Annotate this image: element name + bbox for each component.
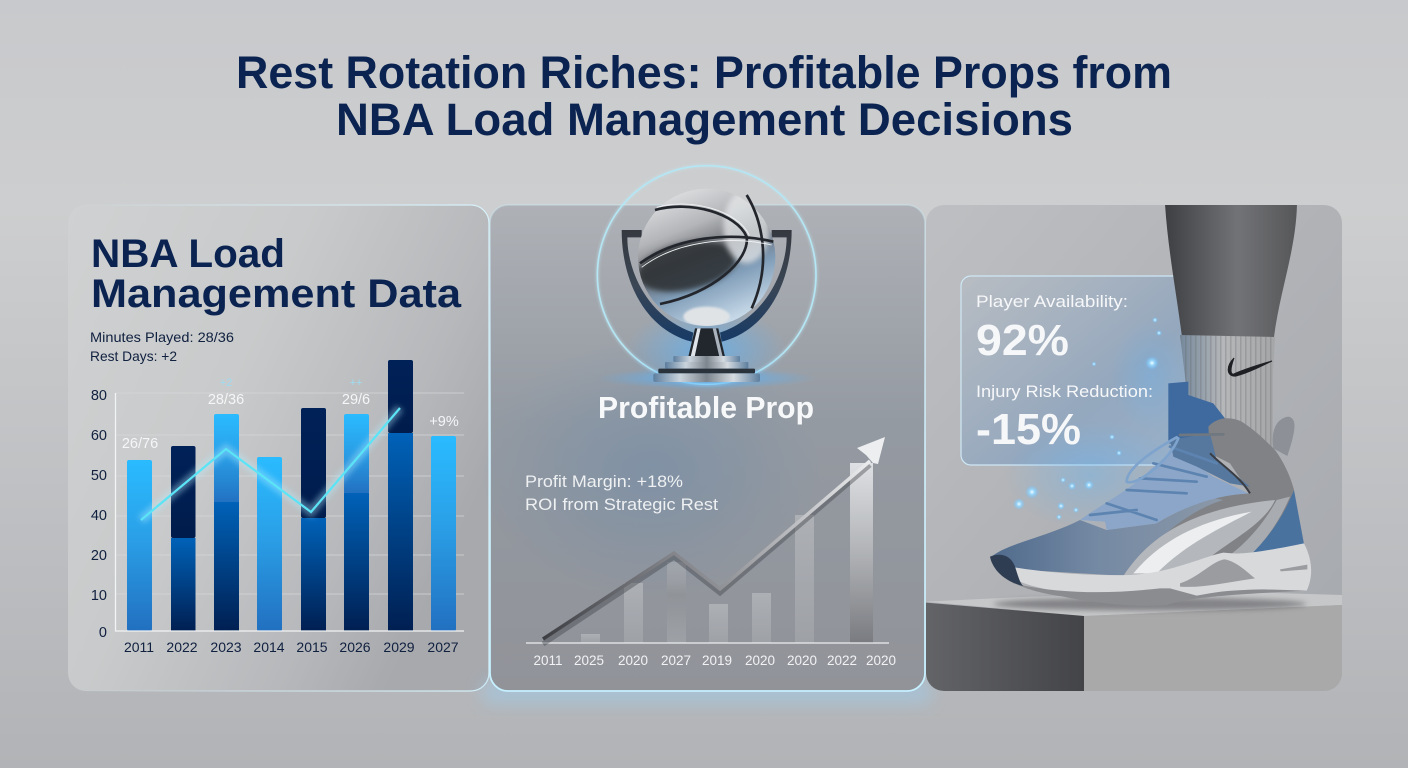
bars — [581, 463, 873, 643]
y axis labels: 10 — [91, 588, 107, 604]
swoosh stripes — [1123, 500, 1275, 576]
x axis labels: 2019 — [702, 653, 732, 668]
x axis labels: 2027 — [661, 653, 691, 668]
trophy icon — [597, 166, 817, 393]
x axis labels: 2011 — [124, 639, 154, 655]
x axis labels: 2011 — [533, 653, 563, 668]
x axis labels: 2026 — [339, 639, 371, 655]
bars — [127, 360, 456, 631]
title — [236, 47, 1172, 145]
icon: swoosh — [1228, 358, 1272, 376]
data labels: +9% — [429, 414, 459, 430]
title: Rest Rotation Riches: Profitable Props from — [236, 47, 1172, 98]
side panel — [1232, 496, 1290, 554]
trend arrow — [543, 437, 885, 644]
data labels: +2 — [220, 377, 232, 389]
x axis labels: 2020 — [787, 653, 817, 668]
title: NBA Load Management Decisions — [336, 94, 1073, 145]
profit text: Profit Margin: +18% — [525, 472, 683, 491]
x axis labels: 2022 — [827, 653, 857, 668]
sock — [1180, 335, 1275, 450]
x axis labels: 2029 — [383, 639, 415, 655]
x axis labels — [533, 653, 896, 668]
stat text — [976, 292, 1153, 454]
midsole — [993, 543, 1311, 597]
stats text — [90, 329, 234, 364]
throat — [1080, 450, 1248, 530]
rear upper — [1156, 418, 1294, 556]
heel pull tab — [1273, 417, 1294, 456]
y axis labels: 60 — [91, 428, 107, 444]
data labels — [122, 377, 459, 452]
y axis labels — [91, 388, 107, 641]
y axis labels: 20 — [91, 548, 107, 564]
forefoot — [991, 497, 1223, 576]
stat text: Injury Risk Reduction: — [976, 382, 1153, 401]
stats text: Minutes Played: 28/36 — [90, 329, 234, 345]
panel: player health — [926, 204, 1343, 693]
panel heading: Management Data — [91, 272, 462, 316]
panel: profitable prop — [480, 166, 932, 704]
stat text: 92% — [976, 316, 1069, 365]
y axis labels: 40 — [91, 508, 107, 524]
laces — [1090, 434, 1223, 520]
leg — [1165, 204, 1297, 337]
midsole indent — [1180, 559, 1255, 587]
panel heading: NBA Load — [91, 232, 285, 276]
y axis labels: 0 — [99, 625, 107, 641]
profit text — [525, 472, 718, 514]
x axis labels: 2027 — [427, 639, 459, 655]
x axis labels: 2020 — [866, 653, 896, 668]
data labels: 29/6 — [342, 392, 370, 408]
x axis labels — [124, 639, 459, 655]
inner collar — [1170, 433, 1250, 487]
y axis labels: 80 — [91, 388, 107, 404]
panel: NBA load management data — [68, 205, 489, 691]
trend line — [141, 408, 400, 520]
baseline — [526, 642, 889, 644]
x axis labels: 2020 — [618, 653, 648, 668]
heading: profitable prop: Profitable Prop — [598, 390, 814, 425]
axes — [116, 393, 464, 631]
panel heading — [91, 232, 462, 316]
stats callout box — [961, 276, 1201, 465]
toe bumper — [990, 555, 1023, 586]
x axis labels: 2015 — [296, 639, 328, 655]
stat text: -15% — [976, 405, 1081, 454]
profit text: ROI from Strategic Rest — [525, 495, 718, 514]
data labels: ++ — [350, 377, 362, 389]
x axis labels: 2023 — [210, 639, 242, 655]
stat text: Player Availability: — [976, 292, 1128, 311]
bar chart — [91, 360, 464, 655]
x axis labels: 2014 — [253, 639, 285, 655]
x axis labels: 2022 — [166, 639, 198, 655]
sparkles — [1014, 318, 1170, 520]
platform — [926, 593, 1343, 693]
x axis labels: 2025 — [574, 653, 604, 668]
stats text: Rest Days: +2 — [90, 348, 177, 364]
tongue — [1168, 382, 1225, 447]
profit chart — [526, 437, 896, 668]
data labels: 28/36 — [208, 392, 244, 408]
x axis labels: 2020 — [745, 653, 775, 668]
sneaker — [990, 382, 1311, 606]
y axis labels: 50 — [91, 468, 107, 484]
blue heel — [1253, 490, 1304, 552]
data labels: 26/76 — [122, 436, 158, 452]
outsole — [1012, 582, 1306, 600]
